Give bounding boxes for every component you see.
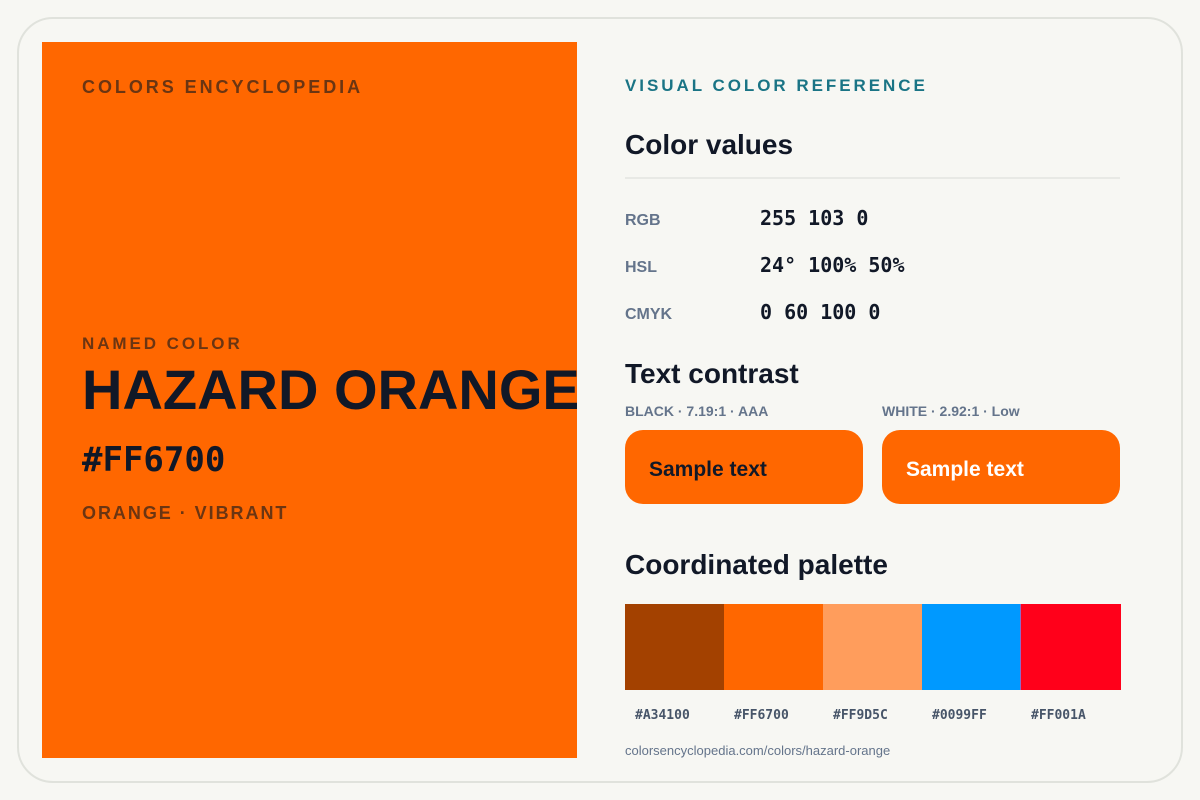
hex value: #FF6700: [82, 440, 225, 480]
contrast sample: black text: Sample text: [649, 458, 767, 481]
RGB row: RGB: [625, 212, 661, 229]
palette hex labels: [635, 708, 1086, 723]
contrast label: black: BLACK · 7.19:1 · AAA: [625, 403, 768, 419]
contrast label: white: WHITE · 2.92:1 · Low: [882, 403, 1020, 419]
swatch: FF9D5C: [823, 604, 922, 690]
HSL row: HSL: [625, 259, 657, 276]
category tags: ORANGE · VIBRANT: [82, 503, 288, 523]
hex: FF9D5C: #FF9D5C: [833, 708, 888, 723]
CMYK row: 0 60 100 0: [760, 300, 880, 324]
RGB row: [625, 206, 868, 230]
panel: color hero: [42, 42, 577, 758]
hex: A34100: #A34100: [635, 708, 690, 723]
contrast sample: white text: Sample text: [906, 458, 1024, 481]
section label: VISUAL COLOR REFERENCE: [625, 76, 928, 95]
hex: 0099FF: #0099FF: [932, 708, 987, 723]
RGB row: 255 103 0: [760, 206, 868, 230]
heading: coordinated palette: Coordinated palette: [625, 549, 888, 580]
hex: FF001A: #FF001A: [1031, 708, 1086, 723]
color values table: [625, 206, 904, 324]
swatch: A34100: [625, 604, 724, 690]
swatch: 0099FF: [922, 604, 1021, 690]
source url: colorsencyclopedia.com/colors/hazard-orange: [625, 743, 890, 758]
hex: FF6700: #FF6700: [734, 708, 789, 723]
contrast sample: white text: [882, 430, 1120, 504]
swatch: FF001A: [1020, 604, 1121, 690]
heading: color values: Color values: [625, 129, 793, 160]
palette swatches: [625, 604, 1121, 690]
swatch: FF6700: [724, 604, 823, 690]
HSL row: [625, 253, 904, 277]
brand label: COLORS ENCYCLOPEDIA: [82, 77, 363, 97]
divider: [625, 177, 1120, 179]
CMYK row: [625, 300, 880, 324]
heading: text contrast: Text contrast: [625, 358, 799, 389]
named color label: NAMED COLOR: [82, 334, 243, 353]
HSL row: 24° 100% 50%: [760, 253, 904, 277]
title: color name: HAZARD ORANGE: [82, 358, 577, 421]
CMYK row: CMYK: [625, 306, 672, 323]
contrast sample: black text: [625, 430, 863, 504]
